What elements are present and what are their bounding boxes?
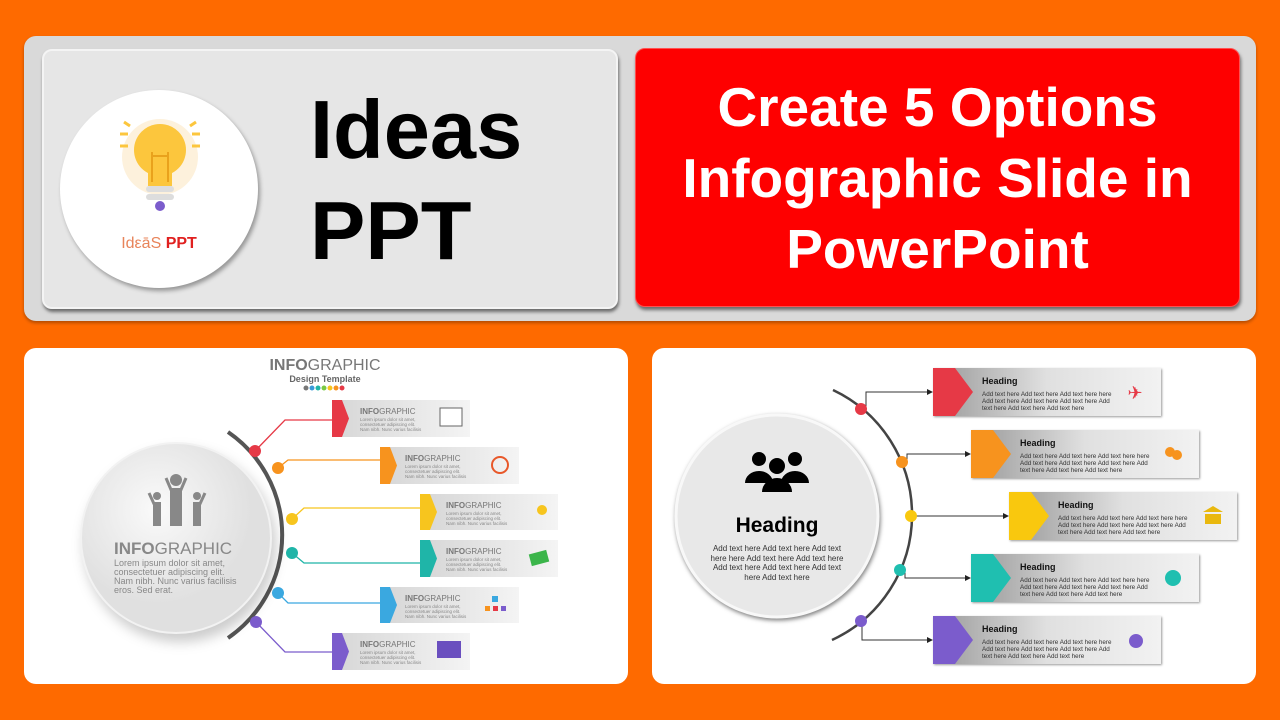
cards: Heading: [982, 376, 1018, 386]
cards: Add text here Add text here Add text here here: [1020, 577, 1150, 584]
title text: PowerPoint: [786, 218, 1089, 280]
cards: Nam nibh. Nunc varius facilisis: [360, 427, 422, 432]
cards: INFOGRAPHIC: [446, 501, 502, 510]
center circle: [81, 443, 271, 633]
center circle: Lorem ipsum dolor sit amet,: [114, 558, 225, 568]
cards: consectetuer adipiscing elit.: [405, 609, 460, 614]
cards: Add text here Add text here Add text here here: [1058, 515, 1188, 522]
cards: Lorem ipsum dolor sit amet,: [446, 511, 502, 516]
cards: [332, 400, 558, 670]
title box: [635, 48, 1240, 307]
brand name: [310, 83, 522, 277]
brand name: PPT: [310, 184, 471, 277]
cards: text here Add text here Add text here: [1020, 591, 1123, 598]
title text: Infographic Slide in: [682, 147, 1193, 209]
cards: Add text here Add text here Add text here Add: [1020, 584, 1148, 591]
cards: text here Add text here Add text here: [1020, 467, 1123, 474]
cards: INFOGRAPHIC: [360, 407, 416, 416]
cards: Heading: [982, 624, 1018, 634]
cards: consectetuer adipiscing elit.: [446, 516, 501, 521]
cards: Lorem ipsum dolor sit amet,: [446, 557, 502, 562]
cards: consectetuer adipiscing elit.: [360, 655, 415, 660]
panel: left infographic: [24, 348, 628, 684]
header: INFOGRAPHIC: [269, 357, 381, 374]
cards: Add text here Add text here Add text here here: [982, 639, 1112, 646]
cards: Lorem ipsum dolor sit amet,: [405, 464, 461, 469]
cards: ✈: [1127, 383, 1143, 403]
cards: Nam nibh. Nunc varius facilisis: [405, 614, 467, 619]
icon: light bulb: [120, 119, 200, 211]
header: [269, 357, 381, 390]
cards: Nam nibh. Nunc varius facilisis: [446, 521, 508, 526]
top banner panel: [24, 36, 1256, 321]
connectors and arc: [228, 420, 420, 652]
dots: [855, 403, 917, 627]
cards: Lorem ipsum dolor sit amet,: [360, 650, 416, 655]
logo text: Idεā̄S PPT: [121, 235, 197, 252]
cards: Add text here Add text here Add text here here: [1020, 453, 1150, 460]
cards: Add text here Add text here Add text here Add: [1020, 460, 1148, 467]
center circle: here Add text here: [744, 573, 810, 582]
cards: Heading: [1058, 500, 1094, 510]
dots: [249, 445, 298, 628]
center circle: here here Add text here Add text here: [711, 554, 844, 563]
center circle: eros. Sed erat.: [114, 585, 173, 595]
center circle: Add text here Add text here Add text: [713, 544, 842, 553]
center circle: Add text here Add text here Add text: [713, 563, 842, 572]
cards: Nam nibh. Nunc varius facilisis: [360, 660, 422, 665]
cards: INFOGRAPHIC: [446, 547, 502, 556]
cards: Nam nibh. Nunc varius facilisis: [446, 567, 508, 572]
center circle: INFOGRAPHIC: [114, 539, 232, 558]
cards: text here Add text here Add text here: [982, 653, 1085, 660]
center circle: Heading: [736, 514, 818, 537]
cards: INFOGRAPHIC: [405, 594, 461, 603]
center circle: [676, 415, 878, 617]
brand name: Ideas: [310, 83, 522, 176]
cards: Heading: [1020, 438, 1056, 448]
title text: Create 5 Options: [717, 76, 1158, 138]
cards: consectetuer adipiscing elit.: [405, 469, 460, 474]
panel: right infographic: [652, 348, 1256, 684]
arc: [832, 390, 912, 640]
cards: Nam nibh. Nunc varius facilisis: [405, 474, 467, 479]
icon: group: [745, 452, 809, 492]
icon: people: [149, 474, 205, 526]
cards: text here Add text here Add text here: [982, 405, 1085, 412]
cards: [933, 368, 1237, 664]
cards: Lorem ipsum dolor sit amet,: [405, 604, 461, 609]
cards: Add text here Add text here Add text here Add: [1058, 522, 1186, 529]
cards: INFOGRAPHIC: [405, 454, 461, 463]
logo circle: [60, 90, 258, 288]
connectors: [862, 392, 1008, 640]
header: Design Template: [289, 374, 361, 384]
cards: Lorem ipsum dolor sit amet,: [360, 417, 416, 422]
title text: [682, 76, 1193, 280]
brand box: [42, 49, 618, 309]
cards: Add text here Add text here Add text here Add: [982, 398, 1110, 405]
cards: Add text here Add text here Add text here here: [982, 391, 1112, 398]
cards: Add text here Add text here Add text here Add: [982, 646, 1110, 653]
cards: Heading: [1020, 562, 1056, 572]
center circle: Nam nibh. Nunc varius facilisis: [114, 576, 237, 586]
cards: text here Add text here Add text here: [1058, 529, 1161, 536]
cards: consectetuer adipiscing elit.: [446, 562, 501, 567]
cards: INFOGRAPHIC: [360, 640, 416, 649]
cards: consectetuer adipiscing elit.: [360, 422, 415, 427]
center circle: consectetuer adipiscing elit.: [114, 567, 225, 577]
